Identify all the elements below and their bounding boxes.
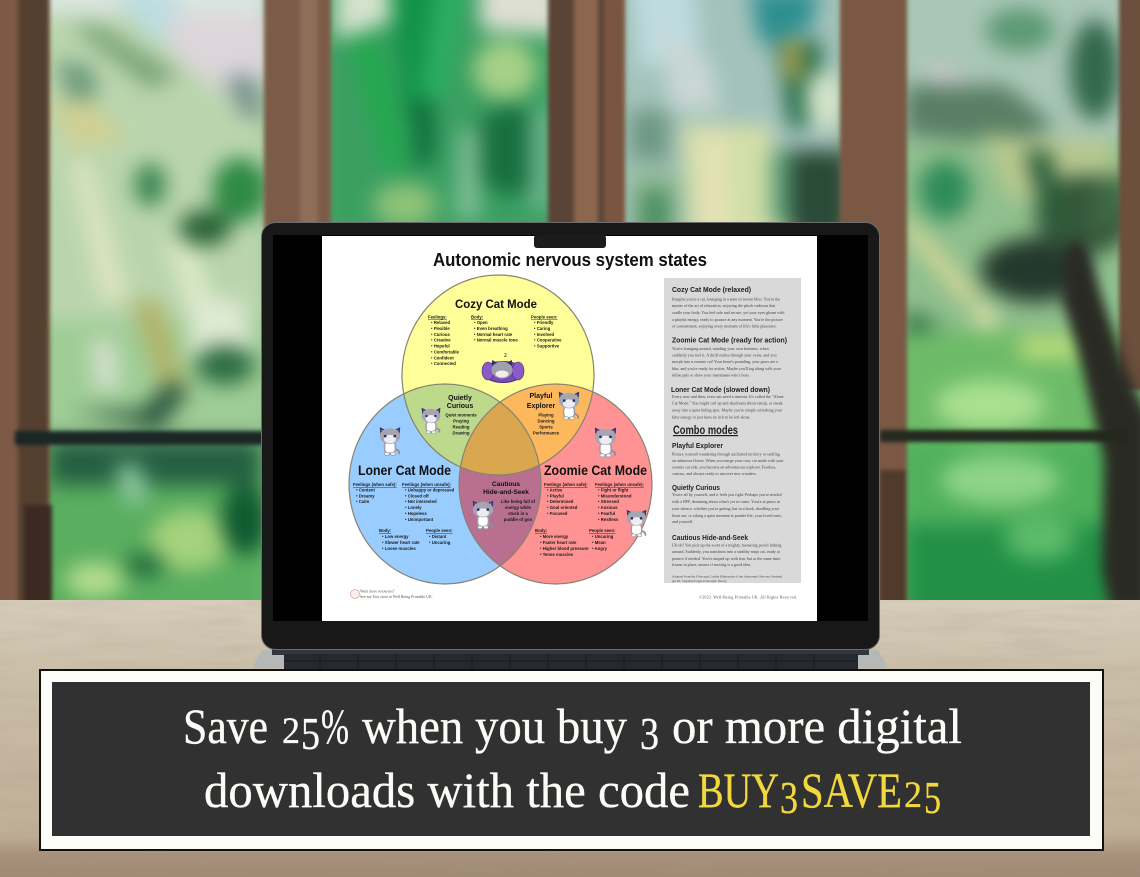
zoomie people seen: • Uncaring: [592, 534, 614, 539]
banner line 1: [183, 698, 962, 759]
footnote text: See my Etsy store at Well Being Printable UK.: [360, 595, 433, 599]
loner feelings safe: • Dreamy: [356, 494, 375, 498]
cozy people seen list: • Friendly: [534, 320, 554, 325]
playful explorer list: Dancing: [538, 418, 555, 424]
overlap: blue and red: [460, 466, 540, 565]
cozy feelings list: • Connected: [431, 361, 456, 366]
zoomie feelings safe: • Active: [547, 488, 563, 492]
loner feelings unsafe: • Lonely: [405, 505, 422, 510]
zoomie feelings unsafe: • Restless: [598, 517, 619, 522]
banner dark panel: [52, 682, 1090, 836]
overlap: all three: [461, 403, 538, 474]
quietly curious list: Quiet moments: [445, 412, 477, 418]
screen area: [273, 235, 868, 621]
zoomie body: Body:: [535, 528, 548, 533]
loner feelings unsafe: • Closed off: [405, 494, 429, 498]
loner feelings safe: • Calm: [356, 499, 369, 504]
cozy people seen list: • Cooperative: [534, 338, 562, 342]
loner people seen: • Distant: [429, 534, 447, 539]
quietly curious list: Drawing: [453, 430, 470, 436]
playful explorer list: Playing: [538, 412, 554, 418]
window four foliage and palm: [895, 0, 1135, 630]
text: playful explorer: Picture yourself wandering through uncharted territory or sniffing: [672, 452, 780, 456]
playful explorer list: Performance: [533, 430, 560, 436]
loner feelings unsafe: • Not interested: [405, 499, 437, 504]
text: cautious: Uh-oh! You pick up the scent of a mighty, menacing pooch lurking: [672, 542, 781, 548]
camera notch: [534, 235, 606, 248]
venn diagram: [349, 275, 652, 584]
quietly curious list: Praying: [453, 418, 469, 424]
icon: anxious cat: [627, 510, 646, 537]
text: zoomie: morph into a zoomie cat! Your heart's pounding, your paws are a: [672, 359, 778, 365]
playful explorer section: [527, 392, 579, 436]
cozy body list: • Normal muscle tone: [474, 338, 518, 342]
text: loner: kitty energy or just have no itch to be left alone.: [672, 414, 750, 420]
zoomie people seen: • Angry: [592, 546, 608, 551]
cozy feelings list: • Comfortable: [431, 350, 460, 354]
text: cozy: of contentment, enjoying every moment of life's little pleasures.: [672, 324, 777, 330]
laptop hinge base: [252, 650, 888, 668]
loner feelings unsafe: Feelings (when unsafe):: [402, 482, 452, 487]
quietly curious section: [422, 395, 477, 436]
loner body: • Loose muscles: [382, 546, 416, 551]
zoomie body: • Higher blood pressure: [540, 546, 589, 551]
icon: flower logo: [350, 590, 360, 598]
loner people seen: People seen:: [426, 528, 453, 533]
heading: combo modes: Combo modes: [673, 423, 738, 437]
text: cautious: frozen in place, unsure if moving is a good idea.: [672, 562, 751, 568]
text: zoomie: blur, and you're ready for action. Maybe you'll tag along with your: [672, 366, 782, 372]
heading: loner: Loner Cat Mode (slowed down): [671, 385, 770, 394]
footnote text: Want more resources?: [360, 590, 395, 594]
cozy cat mode section: [428, 297, 562, 382]
cautious heading: Hide-and-Seek: [483, 489, 529, 496]
text: cautious: around. Suddenly, you transform into a stealthy ninja cat, ready to: [672, 549, 780, 555]
window two foliage: [320, 0, 560, 240]
heading: zoomie: Zoomie Cat Mode (ready for action): [672, 336, 787, 344]
cautious heading: Cautious: [492, 481, 520, 488]
loner body: Body:: [379, 528, 392, 533]
banner line 1: or more digital: [672, 698, 962, 754]
text: cozy: master of the art of relaxation, enjoying the plush cushions that: [672, 303, 776, 309]
loner cat mode section: [353, 427, 455, 551]
heading: quietly curious: Quietly Curious: [672, 483, 720, 492]
zoomie cat mode section: [535, 428, 647, 557]
footnote: more resources: [350, 590, 433, 599]
text: quietly curious: with a BFF, dreaming about what's yet to come. You're at peace in: [672, 499, 780, 505]
discount code: [698, 762, 941, 823]
text: loner: Every now and then, even cats need a timeout. It's called the "Alone: [672, 394, 784, 400]
window three foliage: [615, 0, 850, 240]
copyright line: ©2023. Well-Being Printable UK. All Rights Reserved.: [699, 594, 797, 600]
zoomie feelings safe: • Goal oriented: [547, 505, 578, 510]
loner people seen: • Uncaring: [429, 540, 451, 545]
playful explorer heading: Playful: [530, 393, 553, 400]
zoomie body: • Faster heart rate: [540, 540, 577, 545]
quietly curious heading: Quietly: [448, 395, 472, 402]
loner body: • Low energy: [382, 534, 409, 539]
cozy people seen list: • Involved: [534, 332, 555, 337]
text: cozy: cradle your body. You feel safe and secure, yet your eyes gleam with: [672, 310, 784, 316]
cozy heading: Cozy Cat Mode: [455, 297, 537, 311]
text: loner: Cat Mode." You might curl up and daydream about catnip, or sneak: [672, 400, 784, 406]
banner line 1: 3: [640, 708, 659, 759]
zoomie feelings safe: • Determined: [547, 499, 574, 504]
cozy feelings list: • Hopeful: [431, 344, 450, 348]
window one foliage: [30, 0, 275, 630]
cozy people seen list: People seen:: [531, 314, 558, 320]
cozy body list: • Open: [474, 320, 488, 325]
loner heading: Loner Cat Mode: [358, 462, 451, 478]
circle outlines: [349, 275, 652, 584]
text: source note: Adapted from the Polyvagal Ladder (Hierarchy of the Autonomic Nervous System): [672, 574, 782, 578]
discount code: 3: [780, 772, 798, 823]
cozy feelings list: • Relaxed: [431, 320, 451, 325]
icon: cat sleeping on purple bean bag: z: [504, 353, 507, 359]
table surface: [0, 600, 1140, 877]
background: blurred window view with palm foliage: [0, 0, 1140, 630]
loner feelings unsafe: • Unhappy or depressed: [405, 488, 455, 492]
quietly curious heading: Curious: [447, 403, 473, 410]
zoomie feelings unsafe: • Misunderstood: [598, 494, 632, 498]
document title: Autonomic nervous system states: [433, 249, 707, 270]
window pillars: [0, 0, 50, 610]
cozy feelings list: • Confident: [431, 356, 454, 360]
banner line 1: 2: [282, 711, 300, 752]
zoomie heading: Zoomie Cat Mode: [544, 462, 647, 478]
zoomie feelings safe: • Playful: [547, 494, 564, 498]
text: quietly curious: You're all by yourself, and it feels just right. Perhaps you're nestled: [672, 492, 782, 498]
heading: playful explorer: Playful Explorer: [672, 441, 723, 450]
cozy feelings list: • Curious: [431, 332, 451, 337]
text: zoomie: suddenly you feel it. A thrill rushes through your veins, and you: [672, 352, 776, 358]
cautious hide-and-seek section: [473, 481, 536, 529]
text: playful explorer: an unknown flower. When you merge your cozy cat mode with your: [672, 458, 784, 463]
cautious description: puddle of goo: [504, 517, 533, 522]
icon: loner cat: [380, 427, 400, 455]
palm trunk: [1062, 240, 1140, 610]
text: loner: away into a quiet hiding spot. Maybe you're simply refreshing your: [672, 408, 783, 412]
playful explorer list: Sports: [539, 424, 553, 430]
text: playful explorer: curious, and always ready to uncover new wonders.: [672, 471, 757, 477]
loner feelings safe: Feelings (when safe):: [353, 482, 397, 487]
banner frame: [40, 670, 1103, 850]
text: playful explorer: zoomie cat side, you become an adventurous explorer. Fearless,: [672, 464, 776, 470]
loner body: • Slower heart rate: [382, 540, 420, 545]
text: quietly curious: your silence, whether you're getting lost in a book, doodling your: [672, 506, 780, 512]
text: cozy: a playful energy, ready to pounce at any moment. You're the picture: [672, 317, 783, 323]
zoomie feelings unsafe: • Fight or flight: [598, 488, 629, 492]
laptop lid: [262, 222, 880, 650]
discount code: 2: [904, 775, 922, 816]
discount code: 5: [924, 772, 941, 823]
zoomie feelings safe: • Focused: [547, 511, 568, 516]
icon: cautious cat: [473, 501, 493, 529]
cautious description: energy while: [505, 505, 532, 510]
text: zoomie: feline pals or show your teammates who's boss.: [672, 372, 750, 378]
discount code: BUY: [698, 762, 779, 818]
loner feelings unsafe: • Hopeless: [405, 511, 427, 516]
text: quietly curious: heart out, or taking a quiet moment to ponder life, your loved ones,: [672, 513, 782, 519]
zoomie feelings unsafe: • Stressed: [598, 499, 619, 504]
document page: [322, 236, 817, 621]
zoomie feelings unsafe: • Anxious: [598, 505, 618, 510]
text: quietly curious: and yourself.: [672, 519, 693, 524]
text: source note: per Dr. Stephen Porges Polyvagal Theory: [672, 579, 727, 583]
cozy feelings list: • Flexible: [431, 326, 450, 331]
icon: angry cat: [595, 428, 616, 457]
cozy feelings list: Feelings:: [428, 314, 447, 320]
cautious description: Like being full of: [501, 499, 536, 504]
cozy people seen list: • Caring: [534, 326, 551, 331]
banner line 1: %: [321, 698, 349, 754]
heading: cautious: Cautious Hide-and-Seek: [672, 533, 749, 542]
zoomie people seen: • Mean: [592, 540, 606, 545]
zoomie people seen: People seen:: [589, 528, 616, 533]
playful explorer heading: Explorer: [527, 403, 555, 410]
banner line 2: downloads with the code: [204, 762, 690, 818]
zoomie feelings safe: Feelings (when safe):: [544, 482, 588, 487]
cozy people seen list: • Supportive: [534, 344, 560, 348]
overlap: yellow and red: [501, 384, 592, 464]
keyboard: [272, 649, 869, 669]
quietly curious list: Reading: [453, 424, 470, 430]
cozy body list: • Normal heart rate: [474, 332, 513, 337]
banner line 1: 5: [301, 708, 320, 759]
cozy body list: • Even breathing: [474, 326, 508, 331]
zoomie body: • Tense muscles: [540, 552, 574, 557]
loner feelings safe: • Content: [356, 488, 375, 492]
icon: quiet cat: [422, 408, 440, 434]
zoomie body: • More energy: [540, 534, 569, 539]
icon: playful cat: [559, 392, 579, 420]
cautious description: stuck in a: [508, 511, 529, 516]
overlap: yellow and blue: [404, 384, 499, 466]
banner line 1: Save: [183, 698, 268, 754]
loner feelings unsafe: • Unimportant: [405, 517, 434, 522]
promo banner: [40, 670, 1103, 850]
zoomie feelings unsafe: • Fearful: [598, 511, 615, 516]
zoomie feelings unsafe: Feelings (when unsafe):: [595, 482, 645, 487]
heading: cozy: Cozy Cat Mode (relaxed): [672, 285, 751, 294]
discount code: SAVE: [801, 762, 902, 818]
window rails: [15, 430, 1128, 445]
banner line 1: when you buy: [362, 698, 627, 754]
cozy feelings list: • Creative: [431, 338, 451, 342]
text: zoomie: You're lounging around, minding your own business, when: [672, 346, 769, 352]
cozy body list: Body:: [471, 314, 484, 320]
laptop: [252, 222, 888, 669]
text: cozy: Imagine you're a cat, lounging in a state of serene bliss. You're the: [672, 296, 780, 302]
panel: mode descriptions: [664, 278, 801, 583]
text: cautious: pounce if needed. You're amped up with fear, but at the same time,: [672, 556, 781, 562]
